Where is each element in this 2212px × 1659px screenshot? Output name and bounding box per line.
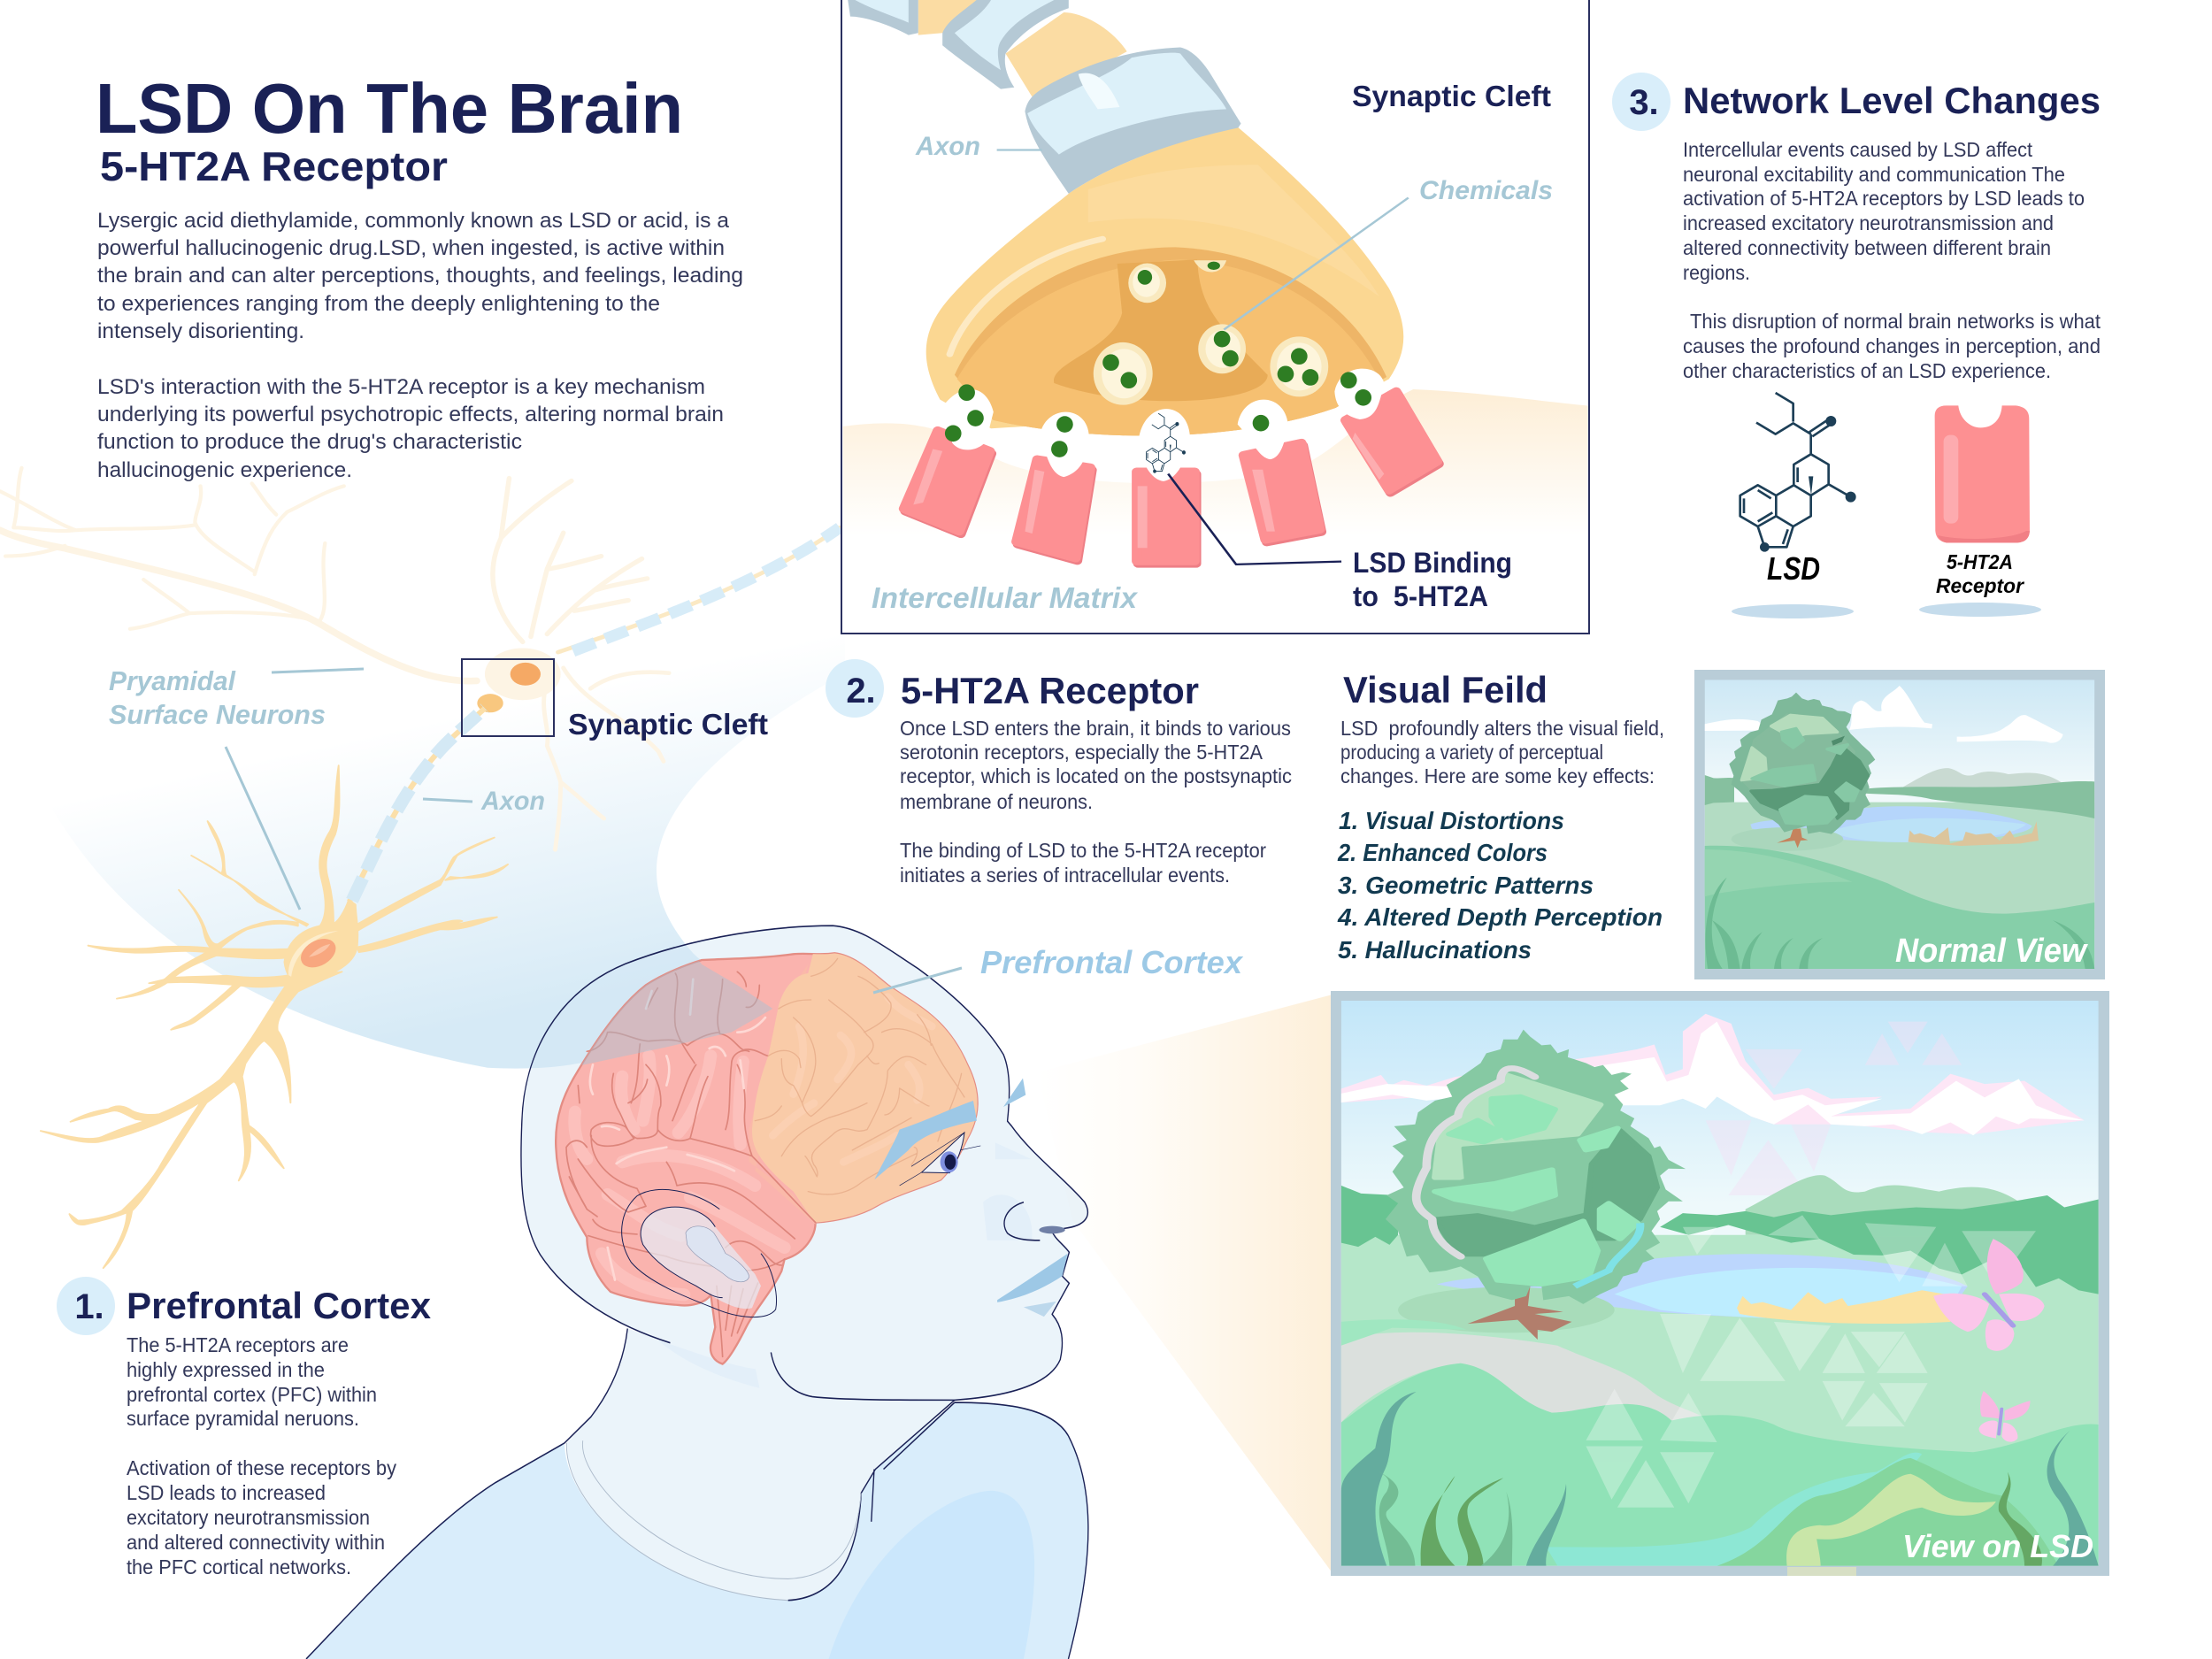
icon: 5-HT2A receptor legend: 5-HT2A [1947, 550, 2013, 573]
number badge 1 [57, 1277, 115, 1335]
clouds [1705, 686, 2063, 743]
leader line: prefrontal cortex [873, 968, 962, 993]
distant mountains [1903, 768, 2062, 787]
body text: producing a variety of perceptual [1340, 741, 1603, 764]
text block: introduction: to experiences ranging from the deeply enlightening to the [97, 292, 660, 316]
panel label: LSD Binding to 5-HT2A: to 5-HT2A [1353, 580, 1488, 612]
panel label: Intercellular Matrix: Intercellular Matrix [872, 581, 1139, 614]
body text: LSD leads to increased [127, 1481, 326, 1504]
synaptic cleft locator box [462, 659, 554, 736]
tree line [1341, 1186, 2099, 1294]
label: Prefrontal Cortex: Prefrontal Cortex [980, 944, 1244, 980]
body text: initiates a series of intracellular events. [900, 864, 1230, 887]
number badge 3: 3. [1629, 83, 1659, 122]
shoulders [306, 1402, 1088, 1659]
white binding pockets [945, 369, 1384, 481]
panel label: LSD Binding to 5-HT2A [1353, 547, 1512, 612]
green chemical molecules [945, 262, 1371, 457]
panel background [841, 0, 1589, 634]
label: Synaptic Cleft: Synaptic Cleft [568, 708, 768, 741]
icon: LSD molecule legend: LSD [1767, 550, 1820, 587]
outer eyebrow [1003, 1079, 1025, 1107]
face shading [658, 1142, 1033, 1388]
label: Pyramidal Surface Neurons: Surface Neurons [109, 699, 326, 730]
label: Axon: Axon [480, 787, 545, 816]
chest highlight [829, 1491, 1034, 1659]
tree [1729, 693, 1875, 848]
receptors [903, 391, 1439, 564]
icon: LSD molecule legend [1732, 393, 1856, 618]
butterfly small [1979, 1391, 2030, 1442]
body text: other characteristics of an LSD experience. [1683, 359, 2051, 382]
mountains [1746, 1175, 2036, 1235]
panel: view on LSD landscape [1331, 991, 2109, 1576]
effects list: 4. Altered Depth Perception [1337, 903, 1663, 931]
body text: Activation of these receptors by [127, 1456, 396, 1479]
label: Normal View: Normal View [1895, 933, 2088, 970]
text block: introduction: underlying its powerful psychotropic effects, altering normal brain [97, 403, 724, 426]
icon: 5-HT2A receptor legend: Receptor [1936, 574, 2024, 597]
nose [1004, 1202, 1040, 1240]
number badge 1: 1. [74, 1287, 104, 1326]
seaweed [1341, 1392, 2099, 1566]
effects list: 1. Visual Distortions [1339, 807, 1564, 834]
section 2: 5-HT2A Receptor [826, 659, 1292, 887]
illustration: faint distant neuron [0, 468, 840, 849]
text block: introduction: LSD's interaction with the 5-HT2A receptor is a key mechanism [97, 375, 705, 399]
tree [1386, 1030, 1686, 1340]
body text: activation of 5-HT2A receptors by LSD leads to [1683, 187, 2085, 210]
text block: introduction: function to produce the drug's characteristic [97, 430, 522, 454]
foreground hill [1705, 846, 2094, 969]
LSD binding leader line [1168, 473, 1341, 565]
blue fan overlay on brain [582, 961, 772, 1065]
small LSD molecule in receptor [1147, 413, 1186, 473]
reeds [1909, 821, 2039, 846]
body text: The 5-HT2A receptors are [127, 1333, 349, 1356]
panel label: LSD Binding to 5-HT2A: LSD Binding [1353, 547, 1512, 579]
body text [127, 1333, 396, 1578]
head outline [521, 926, 1087, 1400]
effects list: 3. Geometric Patterns [1338, 872, 1594, 899]
heading: Visual Feild [1343, 669, 1548, 710]
body text: increased excitatory neurotransmission and [1683, 211, 2054, 234]
body text: causes the profound changes in perception, and [1683, 334, 2101, 357]
label: View on LSD: View on LSD [1902, 1528, 2093, 1564]
body text: surface pyramidal neruons. [127, 1407, 359, 1430]
heading: 5-HT2A Receptor [901, 670, 1199, 711]
text block: introduction: the brain and can alter perceptions, thoughts, and feelings, leading [97, 264, 743, 288]
meadow [1705, 803, 2094, 929]
body text: Once LSD enters the brain, it binds to various [900, 717, 1291, 740]
panel label: Axon: Axon [915, 132, 980, 161]
foreground hill [1341, 1363, 2099, 1566]
icon: 5-HT2A receptor legend [1919, 405, 2041, 617]
body text [1340, 717, 1664, 787]
number badge 3 [1612, 73, 1671, 131]
axon with myelin sheaths [349, 709, 485, 902]
text block: introduction: hallucinogenic experience. [97, 458, 352, 482]
head and neck fill [521, 926, 1087, 1601]
text block: introduction: intensely disorienting. [97, 319, 304, 343]
chemical vesicles [1094, 260, 1328, 405]
body text: LSD profoundly alters the visual field, [1340, 717, 1664, 740]
geometric triangles in sky [1706, 1022, 1962, 1195]
label: Pyramidal Surface Neurons: Pryamidal [109, 665, 236, 696]
eyebrow [874, 1101, 977, 1179]
lake [1750, 806, 2032, 842]
tree line [1705, 775, 2094, 818]
ear [622, 1189, 776, 1317]
panel: synaptic cleft close-up [841, 0, 1589, 634]
body text: This disruption of normal brain networks is what [1690, 310, 2101, 333]
illustration: main pyramidal neuron [41, 709, 508, 1268]
text block: introduction [97, 209, 743, 482]
number badge 2 [826, 659, 884, 718]
clouds [1341, 1014, 2085, 1134]
body text: membrane of neurons. [900, 790, 1093, 813]
butterfly large [1933, 1239, 2045, 1351]
body text [900, 717, 1292, 887]
meadow [1341, 1235, 2099, 1495]
leader line: axon [423, 799, 472, 802]
text block: introduction: Lysergic acid diethylamide, commonly known as LSD or acid, is a [97, 209, 730, 233]
chemicals leader line [1224, 197, 1409, 329]
grass blades [1706, 878, 2094, 969]
body text: highly expressed in the [127, 1358, 325, 1381]
panel label: Synaptic Cleft: Synaptic Cleft [1352, 80, 1551, 112]
grey river bank [1341, 1333, 1754, 1444]
body text: the PFC cortical networks. [127, 1555, 351, 1578]
body text: receptor, which is located on the postsynaptic [900, 764, 1292, 787]
number badge 2: 2. [846, 672, 876, 710]
panel label: Chemicals: Chemicals [1419, 176, 1553, 205]
terminal interior [955, 247, 1386, 435]
foreground mound [1717, 1458, 2059, 1566]
heading: Network Level Changes [1683, 80, 2101, 121]
section 1: Prefrontal Cortex [57, 1277, 432, 1578]
body text: Intercellular events caused by LSD affect [1683, 138, 2033, 161]
leader line: pyramidal neurons to dendrite [272, 669, 364, 672]
axon leader line [997, 148, 1042, 152]
background: vision light cone [1037, 995, 1333, 1573]
body text: changes. Here are some key effects: [1340, 764, 1655, 787]
eye [900, 1133, 980, 1186]
body text: prefrontal cortex (PFC) within [127, 1383, 377, 1406]
myelin sheaths [848, 0, 1241, 194]
effects list: 5. Hallucinations [1338, 936, 1532, 964]
heading: Prefrontal Cortex [127, 1285, 432, 1326]
geometric triangle pattern [1586, 1215, 2036, 1508]
sky [1341, 1001, 2099, 1566]
body text: serotonin receptors, especially the 5-HT2A [900, 741, 1263, 764]
label: Pyramidal Surface Neurons [109, 665, 326, 730]
section 3: Network Level Changes [1612, 73, 2101, 382]
body text: regions. [1683, 261, 1750, 284]
effects list: 2. Enhanced Colors [1337, 839, 1548, 866]
intercellular matrix [843, 389, 1588, 633]
tree shadow [1398, 1287, 1615, 1333]
body text: neuronal excitability and communication The [1683, 163, 2065, 186]
subtitle: 5-HT2A Receptor [100, 143, 448, 189]
body text: The binding of LSD to the 5-HT2A receptor [900, 839, 1266, 862]
panel: normal view landscape [1694, 670, 2105, 979]
axon segment [918, 0, 1127, 101]
body text [1683, 138, 2101, 382]
body text: and altered connectivity within [127, 1531, 385, 1554]
teal stream [1546, 1453, 1922, 1566]
axon terminal bouton [926, 127, 1403, 428]
lips [997, 1254, 1068, 1302]
sky [1705, 680, 2094, 969]
neck and collar lines [306, 1329, 1088, 1659]
section: Visual Field [1337, 669, 1664, 964]
title: LSD On The Brain [96, 69, 683, 148]
shade under tree [1732, 827, 1843, 851]
reeds [1737, 1290, 1950, 1324]
lake [1437, 1254, 1968, 1319]
brain [556, 947, 991, 1364]
leader line: pyramidal neurons to soma [226, 747, 300, 910]
dendrites and soma [41, 765, 508, 1268]
body text: altered connectivity between different brain [1683, 236, 2051, 259]
body text: excitatory neurotransmission [127, 1506, 370, 1529]
path spill over frame [1787, 1567, 1856, 1576]
background: blue fan from neurons to head [21, 408, 845, 1069]
text block: introduction: powerful hallucinogenic drug.LSD, when ingested, is active within [97, 236, 725, 260]
illustration: human head with brain [306, 926, 1088, 1659]
effects list [1337, 807, 1663, 964]
